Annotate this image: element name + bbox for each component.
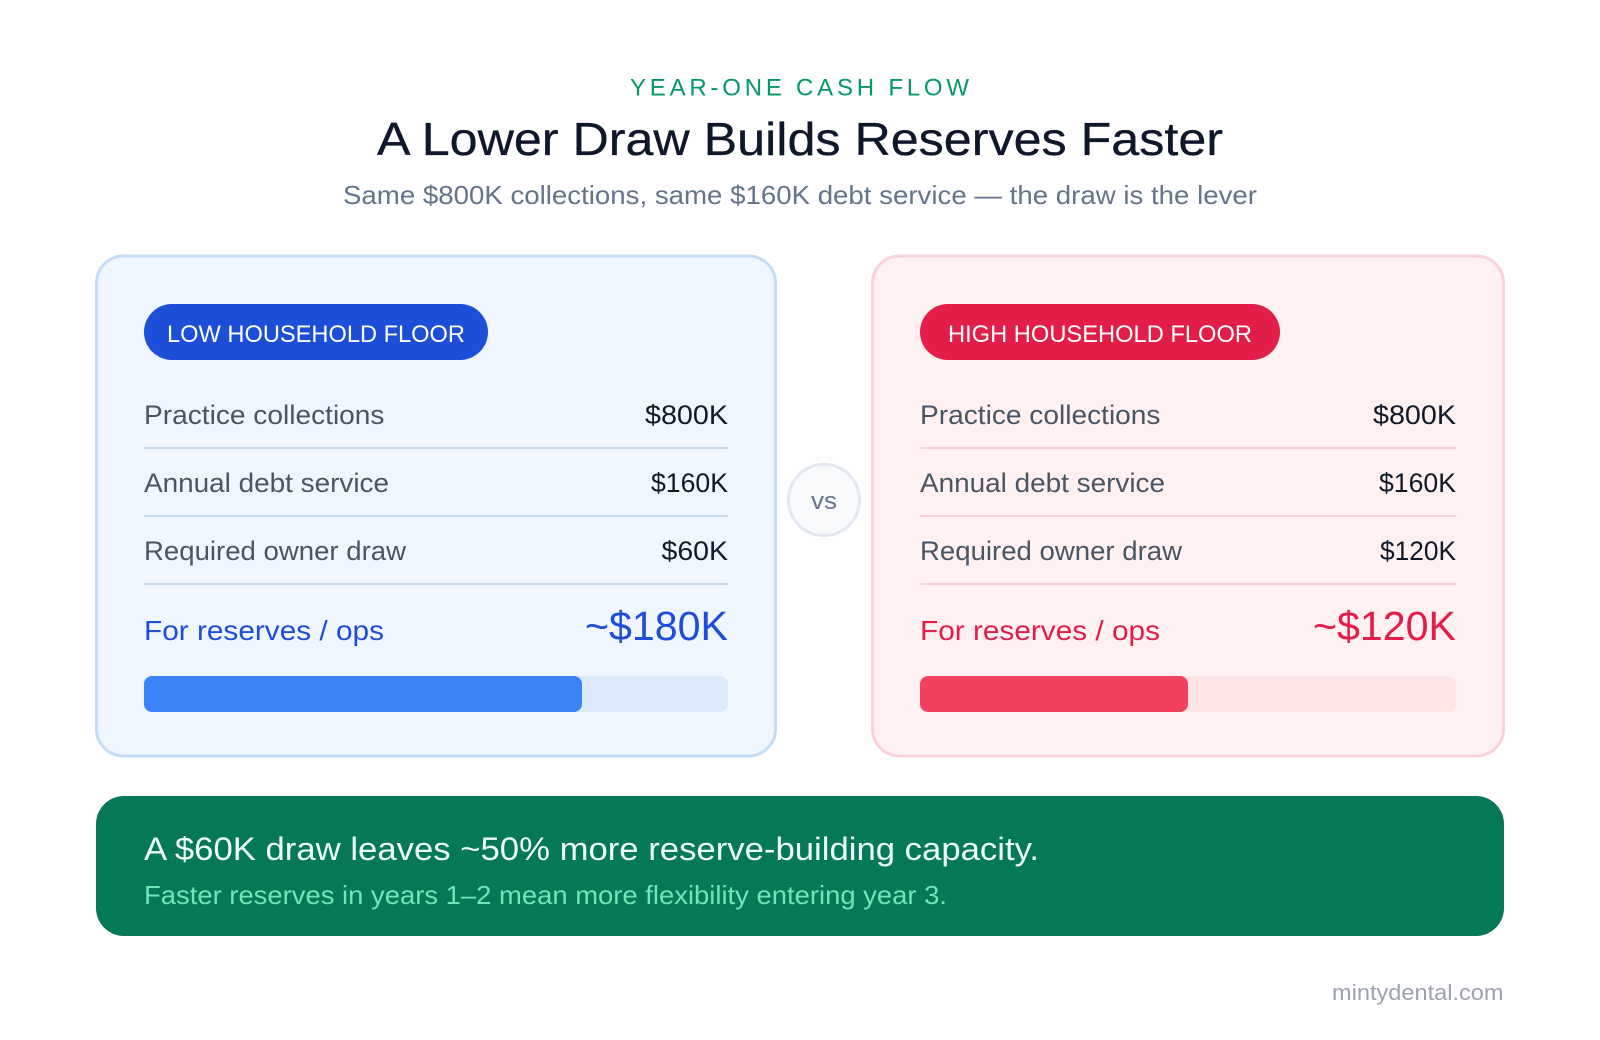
row: required owner draw: Required owner draw	[920, 536, 1183, 566]
row: annual debt service: Annual debt service	[920, 468, 1165, 498]
panel: high household floor	[872, 256, 1504, 756]
row: for reserves / ops: For reserves / ops	[144, 615, 384, 646]
badge: low household floor: LOW HOUSEHOLD FLOOR	[167, 321, 465, 348]
eyebrow: YEAR-ONE CASH FLOW	[630, 74, 969, 102]
vs badge	[788, 464, 860, 536]
header	[343, 74, 1257, 210]
row: for reserves / ops: For reserves / ops	[920, 615, 1160, 646]
row: practice collections	[920, 400, 1456, 430]
row: for reserves / ops	[920, 603, 1456, 649]
row: annual debt service: Annual debt service	[144, 468, 389, 498]
vs badge: vs	[811, 488, 837, 515]
callout: takeaway	[96, 796, 1504, 936]
panel background	[96, 256, 776, 756]
row: practice collections: Practice collections	[144, 400, 384, 430]
panel background	[872, 256, 1504, 756]
panel: low household floor	[96, 256, 776, 756]
row: for reserves / ops	[144, 603, 728, 649]
row: for reserves / ops: ~$180K	[585, 603, 728, 649]
row: required owner draw: $120K	[1380, 536, 1456, 566]
row: for reserves / ops: ~$120K	[1313, 603, 1456, 649]
row: required owner draw: Required owner draw	[144, 536, 407, 566]
row: required owner draw	[144, 536, 728, 566]
row: annual debt service: $160K	[651, 468, 728, 498]
bar chart: 50% reserves	[920, 676, 1456, 712]
row: annual debt service	[144, 468, 728, 498]
row: required owner draw: $60K	[662, 536, 728, 566]
row: practice collections	[144, 400, 728, 430]
subtitle: Same $800K collections, same $160K debt service — the draw is the lever	[343, 180, 1257, 210]
bar chart: 75% reserves	[144, 676, 728, 712]
row: practice collections: $800K	[645, 400, 728, 430]
callout heading: A $60K draw leaves ~50% more reserve-building capacity.	[144, 831, 1039, 867]
badge: low household floor	[144, 304, 488, 360]
callout subtext: Faster reserves in years 1–2 mean more flexibility entering year 3.	[144, 880, 947, 910]
title: A Lower Draw Builds Reserves Faster	[377, 113, 1223, 165]
badge: high household floor: HIGH HOUSEHOLD FLOOR	[948, 321, 1252, 348]
footer: source: mintydental.com	[1332, 980, 1504, 1005]
row: annual debt service: $160K	[1379, 468, 1456, 498]
row: practice collections: Practice collections	[920, 400, 1160, 430]
row: annual debt service	[920, 468, 1456, 498]
row: practice collections: $800K	[1373, 400, 1456, 430]
row: required owner draw	[920, 536, 1456, 566]
badge: high household floor	[920, 304, 1280, 360]
